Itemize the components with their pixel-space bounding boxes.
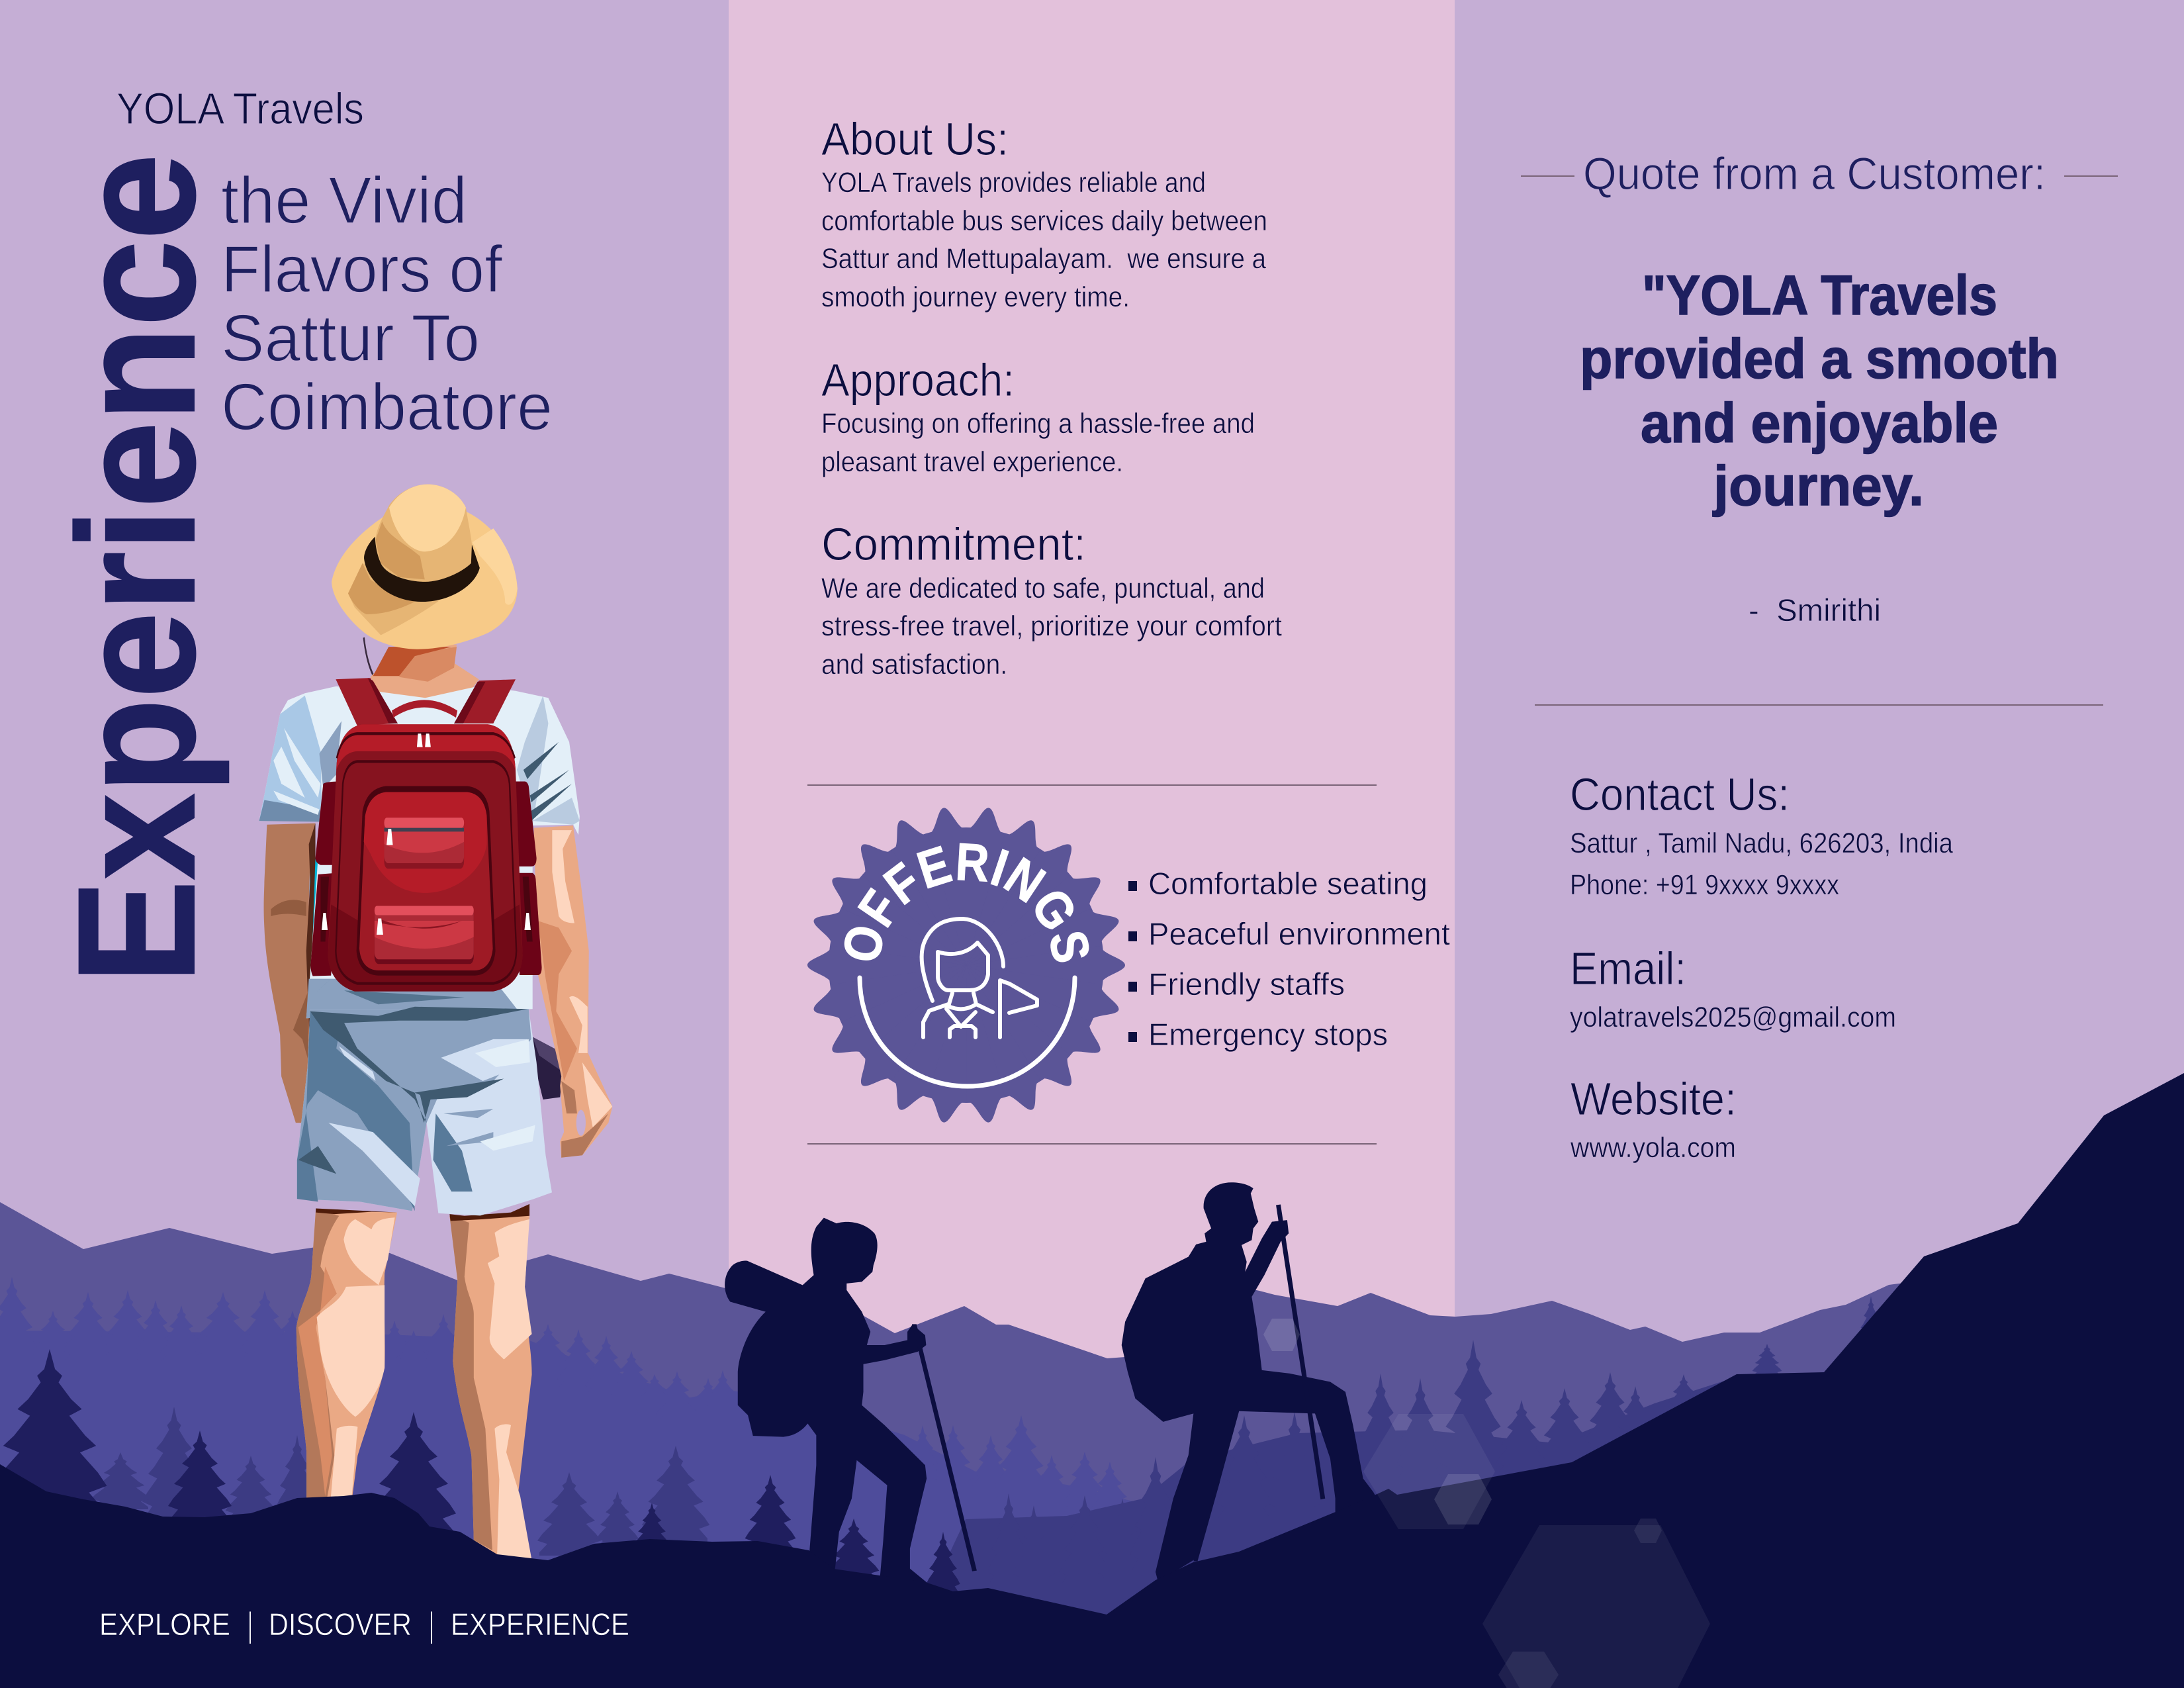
silhouette: woman hiker (725, 1218, 977, 1585)
tagline: | (430, 1606, 433, 1644)
title: Sattur To (221, 301, 480, 375)
tagline (99, 1606, 629, 1644)
offerings list: Friendly staffs (1148, 966, 1345, 1002)
email block (1570, 943, 1896, 1033)
panel: right background (1455, 0, 2184, 1688)
contact block (1570, 769, 1953, 901)
commitment: We are dedicated to safe, punctual, and (821, 573, 1265, 604)
badge scalloped seal (807, 805, 1125, 1125)
silhouette: man hiker (1122, 1182, 1388, 1582)
customer quote: provided a smooth (1580, 328, 2059, 390)
about us: About Us: (821, 113, 1009, 165)
offerings badge (807, 808, 1125, 1123)
title: Flavors of (221, 232, 502, 306)
quote attribution: - Smirithi (1749, 592, 1881, 628)
about us: Sattur and Mettupalayam. we ensure a (821, 243, 1266, 275)
traveller legs (296, 1204, 532, 1560)
panel: middle background (729, 0, 1455, 1688)
shirt (259, 686, 580, 1018)
title: Coimbatore (221, 370, 553, 444)
backpack (310, 678, 542, 992)
offerings list: Peaceful environment (1148, 916, 1450, 951)
about us: YOLA Travels provides reliable and (821, 167, 1206, 199)
about us: comfortable bus services daily between (821, 205, 1267, 237)
traveller upper body (259, 485, 612, 1215)
title: the Vivid (221, 164, 467, 238)
approach: Approach: (821, 354, 1015, 406)
website block: Website: (1570, 1073, 1737, 1125)
arms (264, 823, 316, 1123)
panel: left background (0, 0, 729, 1688)
hat (332, 485, 518, 649)
customer quote: "YOLA Travels (1642, 264, 1997, 326)
tagline: DISCOVER (269, 1607, 412, 1642)
contact block: Phone: +91 9xxxx 9xxxx (1570, 869, 1839, 901)
foreground ridge (0, 1073, 2184, 1688)
illustration: traveller seen from behind (259, 485, 612, 1560)
about us (821, 113, 1267, 313)
badge bottom arc (860, 978, 1075, 1086)
about us: smooth journey every time. (821, 281, 1130, 313)
icon: guide with flag (922, 919, 1037, 1037)
commitment: stress-free travel, prioritize your comfort (821, 610, 1282, 642)
customer quote: journey. (1712, 455, 1924, 517)
commitment: and satisfaction. (821, 649, 1007, 680)
offerings list (1128, 866, 1450, 1052)
forest: dark layer (91, 1296, 1884, 1622)
forest: mid layer (0, 1277, 1165, 1622)
badge label: OFFERINGS (844, 843, 1089, 962)
mountain range (0, 1202, 1919, 1523)
contact block: Contact Us: (1570, 769, 1790, 820)
website block (1570, 1073, 1737, 1164)
tagline: | (248, 1606, 252, 1644)
lens flare hexagons (1263, 1319, 1710, 1688)
customer quote (1580, 264, 2059, 517)
approach: pleasant travel experience. (821, 446, 1123, 478)
neck (371, 645, 479, 698)
email block: yolatravels2025@gmail.com (1570, 1002, 1896, 1033)
customer quote: and enjoyable (1641, 392, 1998, 454)
forest: darkest trees (0, 1349, 960, 1595)
email block: Email: (1570, 943, 1686, 994)
title (221, 164, 553, 444)
tagline: EXPERIENCE (451, 1607, 629, 1642)
tagline: EXPLORE (99, 1607, 230, 1642)
commitment (821, 518, 1282, 680)
offerings list: Emergency stops (1148, 1017, 1388, 1052)
offerings list: Comfortable seating (1148, 866, 1428, 901)
quote heading: Quote from a Customer: (1583, 148, 2046, 199)
website block: www.yola.com (1570, 1132, 1736, 1164)
vertical headline: Experience (44, 154, 230, 984)
commitment: Commitment: (821, 518, 1086, 570)
brand name: YOLA Travels (116, 84, 364, 134)
contact block: Sattur , Tamil Nadu, 626203, India (1570, 827, 1953, 859)
shorts (297, 1009, 552, 1215)
approach: Focusing on offering a hassle-free and (821, 408, 1255, 440)
approach (821, 354, 1255, 478)
